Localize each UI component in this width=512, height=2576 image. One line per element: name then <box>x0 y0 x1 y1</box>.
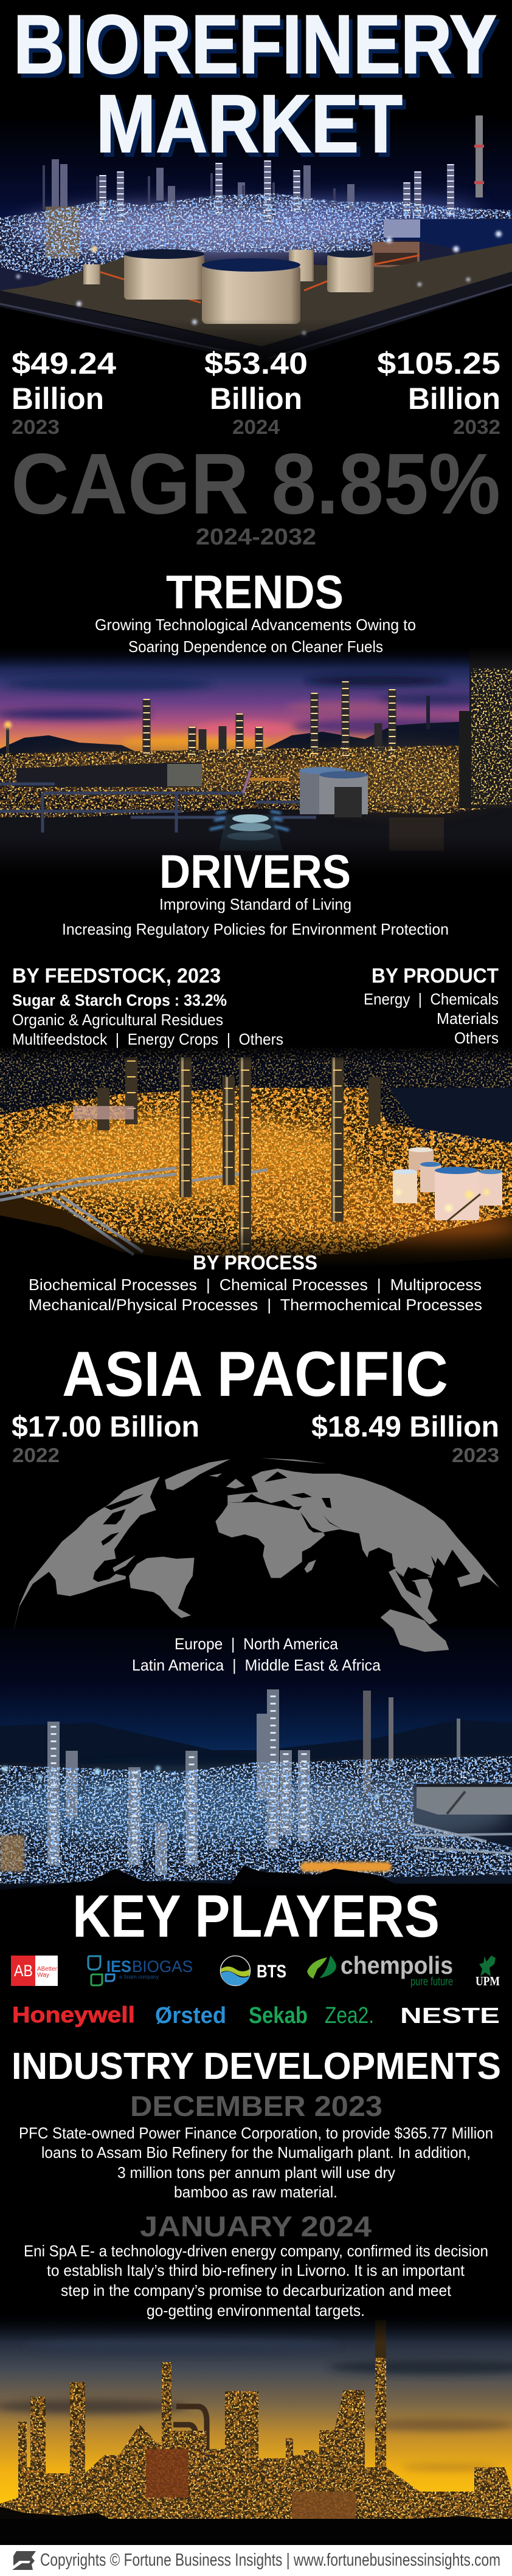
logo: UPM: UPM <box>476 1974 500 1988</box>
stat: 2022 region value: $17.00 Billion <box>12 1411 199 1443</box>
segment: by product: Materials <box>437 1009 499 1028</box>
logo: IES Biogas: IES <box>106 1957 131 1976</box>
development: January 2024: Eni SpA E- a technology-driven energy company, confirmed its decision <box>24 2242 488 2260</box>
text: trends description: Soaring Dependence on Cleaner Fuels <box>128 637 383 656</box>
text: trends description: Growing Technological Advancements Owing to <box>95 616 416 634</box>
text: other regions: Latin America | Middle East & Africa <box>132 1656 381 1674</box>
development: January 2024: go-getting environmental targets. <box>147 2301 365 2320</box>
segment: by feedstock: BY FEEDSTOCK, 2023 <box>12 964 221 987</box>
logo: IES Biogas <box>88 1956 193 1985</box>
stat: 2023 market size <box>12 346 116 438</box>
columns <box>54 1689 304 1875</box>
heading: drivers: DRIVERS <box>159 845 351 898</box>
stat: 2024 market size: Billion <box>210 382 302 416</box>
heading: asia pacific: ASIA PACIFIC <box>62 1339 448 1410</box>
photo: refinery at purple sunset <box>0 647 512 875</box>
stat: 2022 region value <box>12 1411 199 1466</box>
development: December 2023: loans to Assam Bio Refinery for the Numaligarh plant. In addition, <box>41 2143 471 2162</box>
stat: 2024 market size: $53.40 <box>204 346 308 380</box>
tank <box>417 1785 512 1815</box>
stat: 2023 market size: $49.24 <box>12 346 116 380</box>
stat: 2032 market size: Billion <box>408 382 500 416</box>
CAGR figure: 2024-2032 <box>196 524 316 550</box>
stat: 2023 market size: Billion <box>12 382 104 416</box>
process towers <box>147 681 392 757</box>
development: December 2023: bamboo as raw material. <box>174 2183 337 2201</box>
tanks <box>300 771 341 814</box>
icon: Fortune Business Insights logo <box>12 2551 36 2570</box>
segment: by product: Others <box>454 1029 499 1047</box>
logo: IES Biogas: a Snam company <box>119 1974 159 1980</box>
small tanks <box>83 264 100 284</box>
stat: 2032 market size <box>377 346 500 438</box>
segment: by product <box>364 964 499 1047</box>
segment: by feedstock: Multifeedstock | Energy Crops | Others <box>12 1030 283 1048</box>
segment: by process: Mechanical/Physical Processes | Thermochemical Processes <box>29 1296 482 1314</box>
right tall tower <box>469 647 512 808</box>
development: January 2024: JANUARY 2024 <box>140 2210 372 2242</box>
trees and ground <box>0 2507 512 2535</box>
stat: 2023 region value: 2023 <box>452 1444 499 1466</box>
text: drivers description: Increasing Regulatory Policies for Environment Protection <box>62 920 449 938</box>
tank centre <box>202 258 300 324</box>
plant base <box>0 744 512 875</box>
stat: 2023 market size: 2023 <box>12 416 60 438</box>
segment: by product: BY PRODUCT <box>372 964 499 987</box>
text: other regions <box>132 1635 381 1674</box>
segment: by process: Biochemical Processes | Chemical Processes | Multiprocess <box>29 1276 482 1294</box>
segment: by feedstock: Organic & Agricultural Residues <box>12 1011 223 1029</box>
logo: Honeywell: Honeywell <box>12 2002 135 2027</box>
stat: 2032 market size: $105.25 <box>377 346 500 380</box>
tank right <box>327 250 374 292</box>
logo: Orsted: Ørsted <box>155 2003 226 2028</box>
platform <box>0 243 512 346</box>
columns <box>103 1057 375 1252</box>
segment: by product: Energy | Chemicals <box>364 990 499 1008</box>
text: drivers description <box>62 895 449 938</box>
text: drivers description: Improving Standard of Living <box>159 895 351 913</box>
logo: Sekab: Sekab <box>249 2003 308 2028</box>
logo: Zea2: Zea2. <box>325 2003 374 2028</box>
logo: chempolis: chempolis <box>341 1951 453 1979</box>
photo: refinery at golden sunset <box>0 2320 512 2519</box>
logo: chempolis <box>307 1951 453 1988</box>
trees <box>0 1866 512 1895</box>
stat: 2024 market size <box>204 346 308 438</box>
mountains <box>0 714 512 766</box>
development: December 2023: 3 million tons per annum plant will use dry <box>117 2163 395 2182</box>
development: January 2024: step in the company’s promise to decarburization and meet <box>61 2281 452 2300</box>
title: MARKET <box>96 78 403 170</box>
heading: trends: TRENDS <box>166 565 344 619</box>
title <box>13 0 497 170</box>
stat: 2024 market size: 2024 <box>232 416 280 438</box>
logo: BTS <box>220 1956 286 1986</box>
development: December 2023: DECEMBER 2023 <box>130 2090 382 2122</box>
segment: by process <box>29 1251 482 1314</box>
logo: ABetterWay <box>11 1956 58 1986</box>
pipe racks <box>0 769 341 833</box>
footer bar <box>0 2545 512 2576</box>
chimney <box>476 115 483 197</box>
stat: 2022 region value: 2022 <box>12 1444 60 1466</box>
development: January 2024 <box>24 2210 488 2320</box>
logo: IES Biogas: BIOGAS <box>132 1957 193 1976</box>
photo: blue night refinery with storage tanks <box>0 115 512 371</box>
stat: 2032 market size: 2032 <box>453 416 500 438</box>
development: January 2024: to establish Italy’s third bio-refinery in Livorno. It is an important <box>47 2261 465 2279</box>
dark long building <box>16 763 202 787</box>
text: trends description <box>95 616 416 656</box>
heading: key players: KEY PLAYERS <box>72 1883 440 1949</box>
segment: by process: BY PROCESS <box>193 1251 317 1274</box>
logo: Neste: NESTE <box>400 2003 500 2028</box>
logo: ABetterWay: ABetter <box>37 1966 58 1973</box>
logo: chempolis: pure future <box>410 1976 453 1988</box>
beige building <box>372 242 420 268</box>
stat: 2023 region value: $18.49 Billion <box>311 1411 499 1443</box>
stat: 2023 region value <box>311 1411 499 1466</box>
logo: ABetterWay: Way <box>37 1972 49 1979</box>
tank left <box>124 249 204 300</box>
text: other regions: Europe | North America <box>175 1635 339 1653</box>
heading: industry developments: INDUSTRY DEVELOPMENTS <box>12 2045 501 2087</box>
orange lights <box>0 1835 392 1872</box>
world globe <box>13 1458 500 1652</box>
development: December 2023 <box>19 2090 493 2201</box>
logo: ABetterWay: AB <box>14 1962 33 1980</box>
segment: by feedstock: Sugar & Starch Crops : 33.2% <box>12 991 227 1009</box>
logo: BTS: BTS <box>257 1962 286 1982</box>
pipes <box>0 1168 268 1255</box>
photo: golden refinery with white tanks <box>0 1045 512 1268</box>
tanks <box>393 1147 502 1221</box>
logo: UPM <box>476 1956 500 1988</box>
dark blue building <box>384 219 512 253</box>
cooling tower stack <box>210 811 289 851</box>
segment: by feedstock <box>12 964 283 1048</box>
refinery silhouette <box>0 2320 512 2534</box>
photo: blue refinery under navy sky <box>0 1627 512 1895</box>
